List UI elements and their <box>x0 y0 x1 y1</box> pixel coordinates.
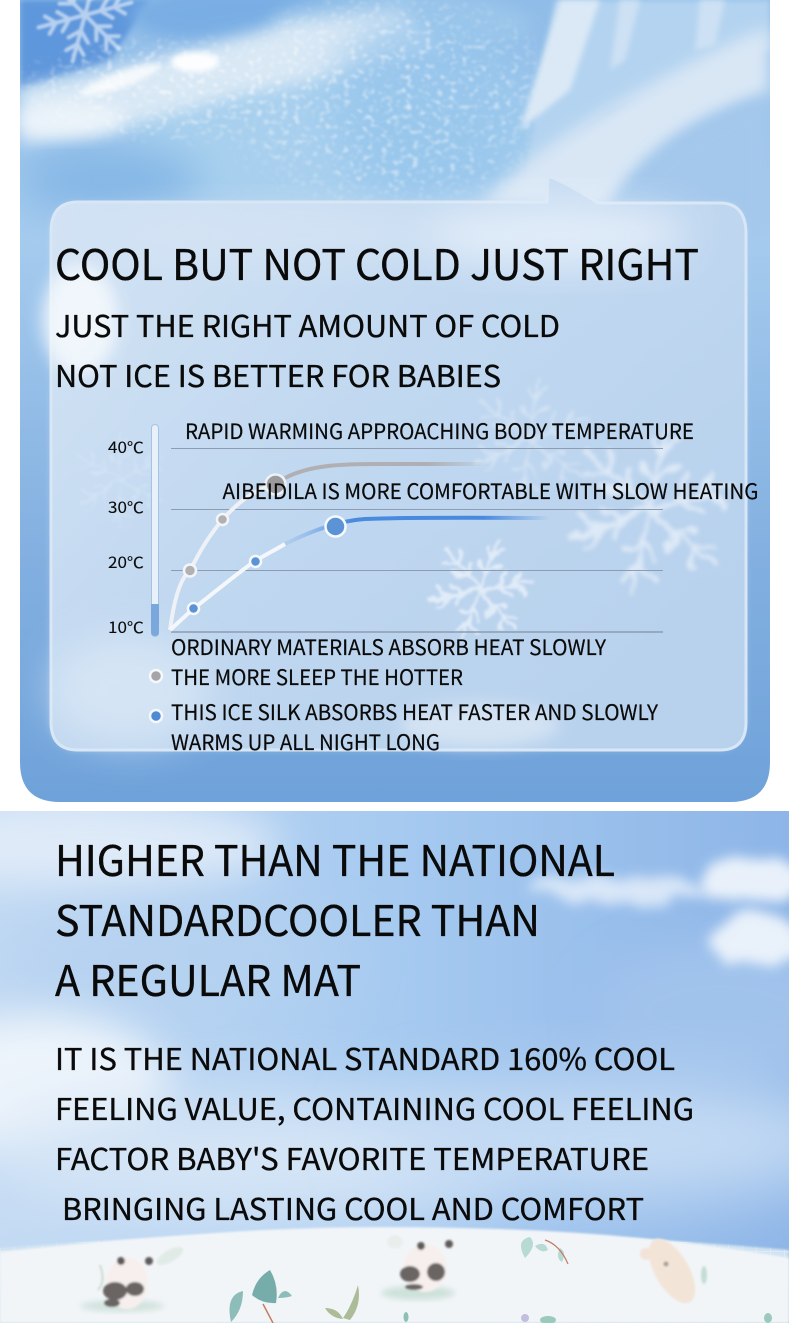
legend item: ordinary materials <box>150 632 607 692</box>
legend item: ordinary materials: THE MORE SLEEP THE HOTTER <box>171 662 463 692</box>
subheading text block <box>55 302 560 396</box>
temperature axis labels <box>108 436 144 638</box>
heading: higher than the national standard <box>55 828 615 1009</box>
chart label: slow heating: AIBEIDILA IS MORE COMFORTABLE WITH SLOW HEATING <box>222 476 758 506</box>
legend item: ice silk: THIS ICE SILK ABSORBS HEAT FASTER AND SLOWLY <box>171 697 659 727</box>
legend <box>150 632 659 757</box>
thermometer scale <box>151 424 159 636</box>
panel: sky section <box>0 800 790 1323</box>
body text block <box>55 1035 694 1229</box>
mat illustration: panda left <box>80 1243 186 1312</box>
temperature axis labels: 40℃ <box>108 436 144 458</box>
heading: higher than the national standard: A REGULAR MAT <box>55 948 361 1009</box>
panel: speech-bubble glass panel <box>51 176 746 750</box>
legend item: ice silk <box>150 697 659 757</box>
temperature axis labels: 30℃ <box>108 496 144 518</box>
clouds <box>0 800 790 1225</box>
mat illustration: leaves <box>230 1237 772 1323</box>
ice speckle texture <box>22 0 536 200</box>
heading: higher than the national standard: STANDARDCOOLER THAN <box>55 888 540 949</box>
temperature axis labels: 20℃ <box>108 551 144 573</box>
temperature axis labels: 10℃ <box>108 616 144 638</box>
chart label: rapid warming: RAPID WARMING APPROACHING BODY TEMPERATURE <box>185 416 694 446</box>
ice background photo <box>20 0 770 215</box>
body text block: FEELING VALUE, CONTAINING COOL FEELING <box>55 1085 694 1129</box>
blue curve: ice silk <box>170 516 550 630</box>
mat surface <box>0 1227 789 1323</box>
line chart: temperature over time <box>108 416 758 638</box>
heading: higher than the national standard: HIGHER THAN THE NATIONAL <box>55 828 615 889</box>
subheading text block: JUST THE RIGHT AMOUNT OF COLD <box>55 302 560 346</box>
panel: top card with ice photo background <box>15 0 770 802</box>
mat illustration: panda center <box>381 1235 455 1300</box>
body text block: FACTOR BABY'S FAVORITE TEMPERATURE <box>55 1135 649 1179</box>
subheading text block: NOT ICE IS BETTER FOR BABIES <box>55 352 501 396</box>
legend item: ordinary materials: ORDINARY MATERIALS ABSORB HEAT SLOWLY <box>171 632 607 662</box>
body text block: IT IS THE NATIONAL STANDARD 160% COOL <box>55 1035 675 1079</box>
panel decoration: snow and snowflakes <box>42 203 750 747</box>
body text block: BRINGING LASTING COOL AND COMFORT <box>62 1185 644 1229</box>
grey curve: ordinary material <box>170 464 490 630</box>
legend item: ice silk: WARMS UP ALL NIGHT LONG <box>171 727 440 757</box>
mat illustration: koala <box>640 1238 708 1304</box>
heading: cool but not cold: COOL BUT NOT COLD JUST RIGHT <box>55 232 699 293</box>
